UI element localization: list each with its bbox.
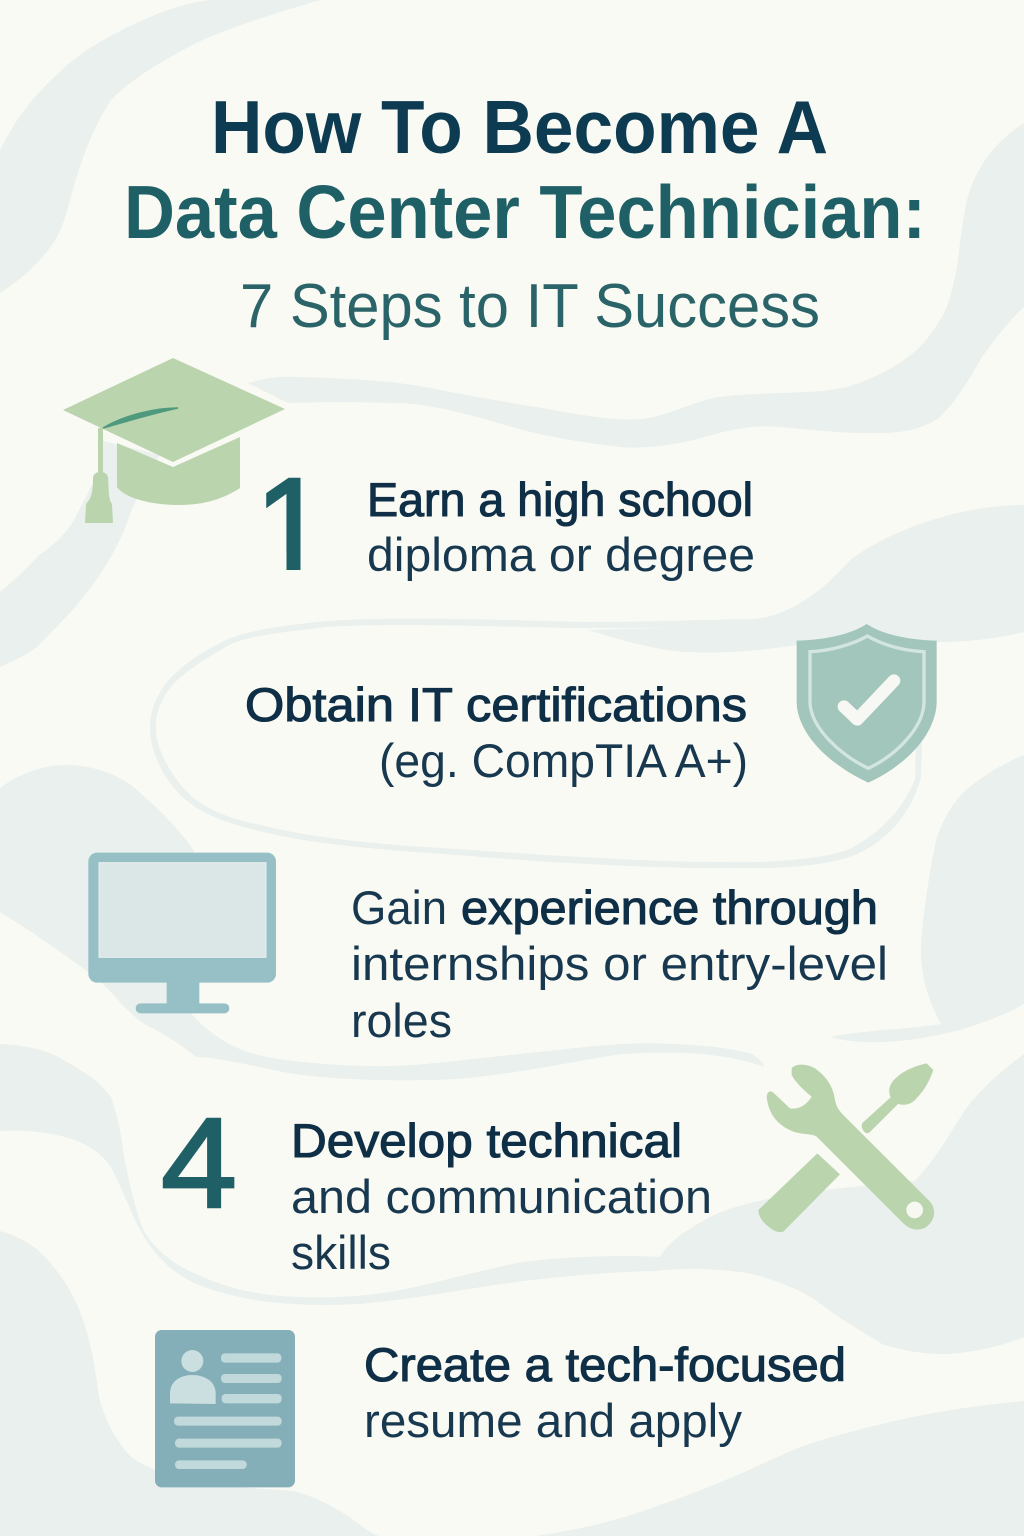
step 3 text: internships or entry-level [351,937,888,990]
title line 2: Data Center Technician: [124,170,926,254]
step 2 text: (eg. CompTIA A+) [379,734,748,787]
step 4 text: skills [291,1226,391,1279]
subtitle: 7 Steps to IT Success [240,272,820,341]
step 3 text: roles [351,994,452,1047]
step 4 text: Develop technical [291,1114,682,1167]
step 1 number: 1 [256,451,328,597]
icon: resume document [155,1330,295,1487]
step 5 text [364,1338,846,1447]
title line 1: How To Become A [211,85,828,169]
step 3 text: Gain [351,881,447,934]
step 4 text: and communication [291,1170,712,1223]
icon: graduation cap [63,358,285,523]
step 1 text [367,473,755,581]
icon: wrench and screwdriver [758,1063,934,1232]
icon: monitor [88,853,276,1013]
step 3 text [351,881,888,1047]
step 4 text [291,1114,712,1279]
step 4 number: 4 [161,1092,237,1235]
step 2 text [245,678,748,787]
step 5 text: resume and apply [364,1394,742,1447]
title [124,85,926,254]
step 2 text: Obtain IT certifications [245,678,747,731]
step 1 text: diploma or degree [367,528,755,581]
step 5 text: Create a tech-focused [364,1338,846,1391]
step 3 text: experience through [461,881,878,934]
step 1 text: Earn a high school [367,473,753,526]
icon: shield with check [797,624,937,783]
